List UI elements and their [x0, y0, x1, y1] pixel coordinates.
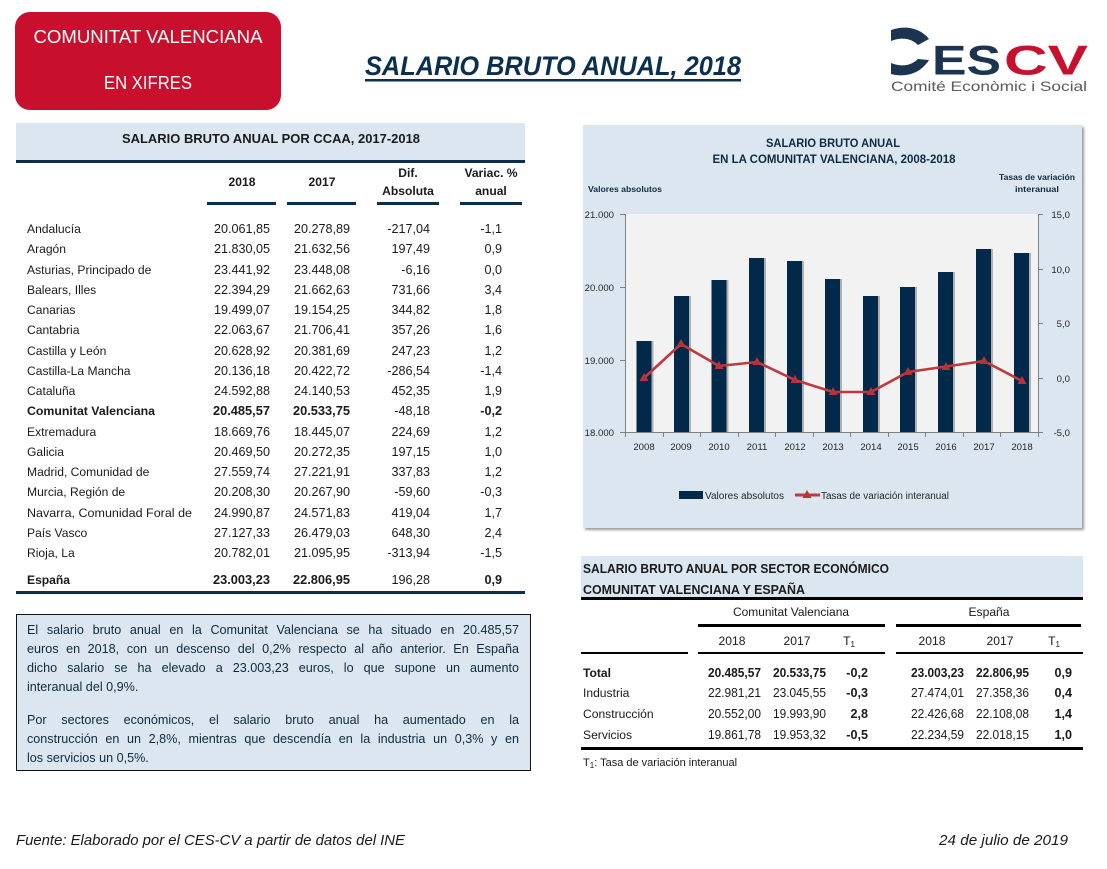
row: Total: 22.806,95 — [976, 666, 1029, 680]
sector column headers: 2017 — [784, 634, 811, 648]
row: Construcción: 19.993,90 — [773, 707, 826, 721]
row: Galicia: Galicia — [27, 445, 64, 459]
row: Canarias: 1,8 — [484, 303, 502, 317]
row: España: 22.806,95 — [293, 573, 350, 587]
row: Asturias: -6,16 — [401, 263, 430, 277]
row: Extremadura — [27, 425, 502, 439]
row: Castilla y León — [27, 344, 502, 358]
row: Asturias: Asturias, Principado de — [27, 263, 152, 277]
row: Construcción: 1,4 — [1054, 707, 1072, 721]
row: Castilla-La Mancha: -286,54 — [387, 364, 430, 378]
sector column headers: Comunitat Valenciana — [733, 605, 849, 619]
row: Industria — [583, 686, 1072, 700]
year labels: 2014 — [860, 442, 882, 453]
left axis labels: 21.000 — [585, 210, 614, 221]
panel: table by economic sector — [581, 556, 1083, 770]
logo: CES-CV — [891, 28, 1088, 94]
right axis title: Tasas de variación — [999, 172, 1075, 182]
text box: summary: El salario bruto anual en la Comunitat Valenciana se ha situado en 20.485,57 — [27, 623, 519, 637]
row: Galicia: 20.469,50 — [214, 445, 270, 459]
footnote: T — [583, 757, 590, 769]
row: Navarra: 24.571,83 — [294, 506, 350, 520]
row: Castilla-La Mancha — [27, 364, 502, 378]
row: Madrid: 27.221,91 — [294, 465, 350, 479]
row: Galicia: 197,15 — [391, 445, 430, 459]
year labels: 2016 — [935, 442, 957, 453]
legend: Valores absolutos — [705, 491, 784, 502]
right axis labels — [1051, 210, 1070, 439]
row: Rioja: 21.095,95 — [294, 546, 350, 560]
right axis title — [999, 172, 1075, 194]
row: Balears: 731,66 — [391, 283, 430, 297]
title: SALARIO BRUTO ANUAL, 2018 — [365, 51, 741, 81]
row: Murcia: 20.208,30 — [214, 485, 270, 499]
row: Andalucía: 20.278,89 — [294, 222, 350, 236]
sector column headers: 1 — [850, 640, 855, 649]
row: Balears: Balears, Illes — [27, 283, 96, 297]
sector column headers: 2018 — [719, 634, 746, 648]
row: Cantabria: Cantabria — [27, 323, 80, 337]
row: Construcción: 22.426,68 — [911, 707, 964, 721]
row: Navarra: 24.990,87 — [214, 506, 270, 520]
row: Total: Total — [583, 666, 611, 680]
column headers: Absoluta — [382, 184, 434, 198]
row: Total: 20.533,75 — [773, 666, 826, 680]
row: Asturias: 23.448,08 — [294, 263, 350, 277]
row: Cataluña: 24.592,88 — [214, 384, 270, 398]
right axis labels: 5,0 — [1057, 319, 1070, 330]
row: Castilla-La Mancha: 20.136,18 — [214, 364, 270, 378]
row: Servicios: 1,0 — [1054, 728, 1072, 742]
logo: CES-CV: CV — [1004, 36, 1088, 84]
row: Construcción: 20.552,00 — [708, 707, 761, 721]
right axis labels: 15,0 — [1051, 210, 1070, 221]
row: Castilla y León: 1,2 — [484, 344, 502, 358]
row: Industria: -0,3 — [846, 686, 868, 700]
row: Cantabria — [27, 323, 502, 337]
year labels: 2017 — [973, 442, 995, 453]
row: Asturias: 23.441,92 — [214, 263, 270, 277]
row: Aragón: Aragón — [27, 242, 66, 256]
row: Aragón — [27, 242, 502, 256]
footnote: : Tasa de variación interanual — [594, 757, 737, 769]
chart title: SALARIO BRUTO ANUAL — [766, 137, 900, 150]
row: Andalucía: 20.061,85 — [214, 222, 270, 236]
right axis title: interanual — [1015, 184, 1059, 194]
logo: CES-CV: Comité Econòmic i Social — [891, 78, 1087, 94]
sector table heading: SALARIO BRUTO ANUAL POR SECTOR ECONÓMICO — [583, 561, 889, 576]
source note: Fuente: Elaborado por el CES-CV a partir de datos del INE — [16, 833, 405, 849]
sector column headers — [581, 605, 1083, 654]
row: Cantabria: 22.063,67 — [214, 323, 270, 337]
row: Industria: Industria — [583, 686, 630, 700]
row: Total — [583, 666, 1072, 680]
row: Servicios: 22.234,59 — [911, 728, 964, 742]
badge: Comunitat Valenciana en xifres: COMUNITAT VALENCIANA — [34, 26, 263, 47]
row: Comunitat Valenciana: -48,18 — [394, 404, 430, 418]
row: Aragón: 21.830,05 — [214, 242, 270, 256]
year labels: 2010 — [708, 442, 730, 453]
row: Cataluña: 1,9 — [484, 384, 502, 398]
row: Madrid: Madrid, Comunidad de — [27, 465, 150, 479]
axes and ticks — [620, 214, 1043, 437]
year labels: 2012 — [784, 442, 806, 453]
sector table heading — [581, 556, 1083, 600]
left axis labels — [585, 210, 614, 439]
chart title — [712, 137, 956, 166]
sector column headers: 1 — [1055, 640, 1060, 649]
row: Castilla y León: 247,23 — [391, 344, 430, 358]
row: Comunitat Valenciana: -0,2 — [480, 404, 502, 418]
row: Canarias: 19.154,25 — [294, 303, 350, 317]
right axis labels: 0,0 — [1057, 374, 1070, 385]
row: Murcia — [27, 485, 502, 499]
legend — [679, 490, 949, 502]
sector column headers: España — [968, 605, 1010, 619]
row: Balears: 22.394,29 — [214, 283, 270, 297]
row: Aragón: 21.632,56 — [294, 242, 350, 256]
row: Aragón: 197,49 — [391, 242, 430, 256]
row: Rioja — [27, 546, 502, 560]
text box: summary: los servicios un 0,5%. — [27, 751, 149, 765]
row: Murcia: -0,3 — [480, 485, 502, 499]
column headers — [207, 166, 522, 205]
year labels — [633, 442, 1033, 453]
row: Servicios: 19.861,78 — [708, 728, 761, 742]
row: Canarias: 19.499,07 — [214, 303, 270, 317]
year labels: 2013 — [822, 442, 844, 453]
row: Rioja: -1,5 — [480, 546, 502, 560]
row: Industria: 27.474,01 — [911, 686, 964, 700]
text box: summary: interanual del 0,9%. — [27, 680, 138, 694]
row: Comunitat Valenciana: 20.485,57 — [213, 404, 270, 418]
row: Cataluña: 452,35 — [391, 384, 430, 398]
row: Madrid: 1,2 — [484, 465, 502, 479]
row: Navarra: 1,7 — [484, 506, 502, 520]
row: Andalucía: Andalucía — [27, 222, 81, 236]
row: Asturias: 0,0 — [484, 263, 502, 277]
right axis labels: 10,0 — [1051, 265, 1070, 276]
table heading: SALARIO BRUTO ANUAL POR CCAA, 2017-2018 — [122, 131, 420, 146]
column headers: 2017 — [309, 175, 336, 189]
row: España: 23.003,23 — [213, 573, 270, 587]
panel: table by region — [16, 123, 525, 594]
column headers: 2018 — [229, 175, 256, 189]
plot area — [625, 214, 1038, 432]
badge: Comunitat Valenciana en xifres: EN XIFRES — [104, 72, 192, 93]
row: Madrid: 337,83 — [391, 465, 430, 479]
sector column headers: T — [1048, 634, 1055, 648]
line: tasas de variación — [640, 339, 1026, 395]
column headers: Variac. % — [464, 166, 518, 180]
row: Andalucía — [27, 222, 502, 236]
row: Extremadura: 18.445,07 — [294, 425, 350, 439]
row: Extremadura: 18.669,76 — [214, 425, 270, 439]
row: Balears: 3,4 — [484, 283, 502, 297]
row: España — [27, 573, 502, 587]
row: Rioja: Rioja, La — [27, 546, 75, 560]
row: Canarias: Canarias — [27, 303, 75, 317]
row: España: España — [27, 573, 70, 587]
row: Rioja: -313,94 — [387, 546, 430, 560]
year labels: 2015 — [897, 442, 919, 453]
row: Castilla-La Mancha: -1,4 — [480, 364, 502, 378]
row: Canarias — [27, 303, 502, 317]
row: Murcia: 20.267,90 — [294, 485, 350, 499]
year labels: 2011 — [747, 442, 767, 453]
row: Industria: 22.981,21 — [708, 686, 761, 700]
row: Navarra — [27, 506, 502, 520]
row: Andalucía: -217,04 — [387, 222, 430, 236]
row: Construcción: 22.108,08 — [976, 707, 1029, 721]
row: Total: 23.003,23 — [911, 666, 964, 680]
row: Construcción: Construcción — [583, 707, 654, 721]
row: País Vasco: País Vasco — [27, 526, 88, 540]
row: Castilla y León: Castilla y León — [27, 344, 106, 358]
right axis labels: -5,0 — [1053, 428, 1070, 439]
row: Extremadura: 1,2 — [484, 425, 502, 439]
row: País Vasco: 2,4 — [484, 526, 502, 540]
row: Cantabria: 357,26 — [391, 323, 430, 337]
text box: summary — [16, 614, 531, 771]
row: Canarias: 344,82 — [391, 303, 430, 317]
row: Industria: 23.045,55 — [773, 686, 826, 700]
row: País Vasco — [27, 526, 502, 540]
row: Madrid — [27, 465, 502, 479]
row: Rioja: 20.782,01 — [214, 546, 270, 560]
text box: summary: euros en 2018, con un descenso del 0,2% respecto al año anterior. En España — [27, 642, 519, 656]
sector column headers: 2017 — [987, 634, 1014, 648]
row: Navarra: Navarra, Comunidad Foral de — [27, 506, 192, 520]
row: Comunitat Valenciana: Comunitat Valenciana — [27, 404, 155, 418]
row: Castilla-La Mancha: Castilla-La Mancha — [27, 364, 131, 378]
row: Asturias — [27, 263, 502, 277]
row: Cantabria: 1,6 — [484, 323, 502, 337]
row: Servicios: 22.018,15 — [976, 728, 1029, 742]
legend: Tasas de variación interanual — [821, 491, 949, 502]
row: Industria: 0,4 — [1054, 686, 1072, 700]
row: Castilla-La Mancha: 20.422,72 — [294, 364, 350, 378]
row: Cataluña — [27, 384, 502, 398]
row: Servicios: 19.953,32 — [773, 728, 826, 742]
row: Murcia: Murcia, Región de — [27, 485, 125, 499]
row: País Vasco: 648,30 — [391, 526, 430, 540]
text box: summary: Por sectores económicos, el salario bruto anual ha aumentado en la — [27, 713, 519, 727]
left axis labels: 19.000 — [585, 356, 614, 367]
row: Servicios: -0,5 — [846, 728, 868, 742]
text box: summary: construcción en un 2,8%, mientras que descendía en la industria un 0,3% y en — [27, 732, 519, 746]
row: Total: 20.485,57 — [708, 666, 761, 680]
row: Total: 0,9 — [1054, 666, 1072, 680]
left axis labels: 20.000 — [585, 283, 614, 294]
row: Andalucía: -1,1 — [480, 222, 502, 236]
row: Navarra: 419,04 — [391, 506, 430, 520]
text box: summary: dicho salario se ha elevado a 23.003,23 euros, lo que supone un aumento — [27, 661, 519, 675]
row: Madrid: 27.559,74 — [214, 465, 270, 479]
row: Extremadura: 224,69 — [391, 425, 430, 439]
sector column headers: 2018 — [919, 634, 946, 648]
row: País Vasco: 26.479,03 — [294, 526, 350, 540]
row: Castilla y León: 20.381,69 — [294, 344, 350, 358]
date: 24 de julio de 2019 — [938, 833, 1068, 849]
row: Construcción — [583, 707, 1072, 721]
row: Extremadura: Extremadura — [27, 425, 97, 439]
row: Servicios — [583, 728, 1072, 742]
row: Balears: 21.662,63 — [294, 283, 350, 297]
row: Cataluña: Cataluña — [27, 384, 76, 398]
chart title: EN LA COMUNITAT VALENCIANA, 2008-2018 — [712, 153, 956, 166]
row: Servicios: Servicios — [583, 728, 632, 742]
column headers: anual — [475, 184, 507, 198]
row: Galicia: 1,0 — [484, 445, 502, 459]
row: Cataluña: 24.140,53 — [294, 384, 350, 398]
sector column headers: T — [843, 634, 850, 648]
column headers: Dif. — [398, 166, 418, 180]
row: Murcia: -59,60 — [394, 485, 430, 499]
row: Galicia: 20.272,35 — [294, 445, 350, 459]
row: España: 196,28 — [391, 573, 430, 587]
panel: line and bar chart — [583, 125, 1084, 530]
sector table heading: COMUNITAT VALENCIANA Y ESPAÑA — [583, 582, 806, 597]
row: Comunitat Valenciana: 20.533,75 — [293, 404, 350, 418]
row: Total: -0,2 — [846, 666, 868, 680]
table heading — [16, 123, 525, 163]
year labels: 2009 — [670, 442, 692, 453]
row: Construcción: 2,8 — [850, 707, 868, 721]
logo: CES-CV: ES — [932, 36, 1001, 84]
year labels: 2018 — [1011, 442, 1033, 453]
row: Galicia — [27, 445, 502, 459]
row: Balears — [27, 283, 502, 297]
row: Comunitat Valenciana — [27, 404, 502, 418]
bars: valores absolutos — [636, 249, 1031, 432]
badge: Comunitat Valenciana en xifres — [15, 12, 281, 110]
row: Aragón: 0,9 — [484, 242, 502, 256]
row: Castilla y León: 20.628,92 — [214, 344, 270, 358]
row: País Vasco: 27.127,33 — [214, 526, 270, 540]
row: Cantabria: 21.706,41 — [294, 323, 350, 337]
left axis title: Valores absolutos — [588, 184, 662, 194]
footnote: 1 — [590, 761, 595, 770]
row: España: 0,9 — [484, 573, 502, 587]
row: Industria: 27.358,36 — [976, 686, 1029, 700]
year labels: 2008 — [633, 442, 655, 453]
left axis labels: 18.000 — [585, 428, 614, 439]
